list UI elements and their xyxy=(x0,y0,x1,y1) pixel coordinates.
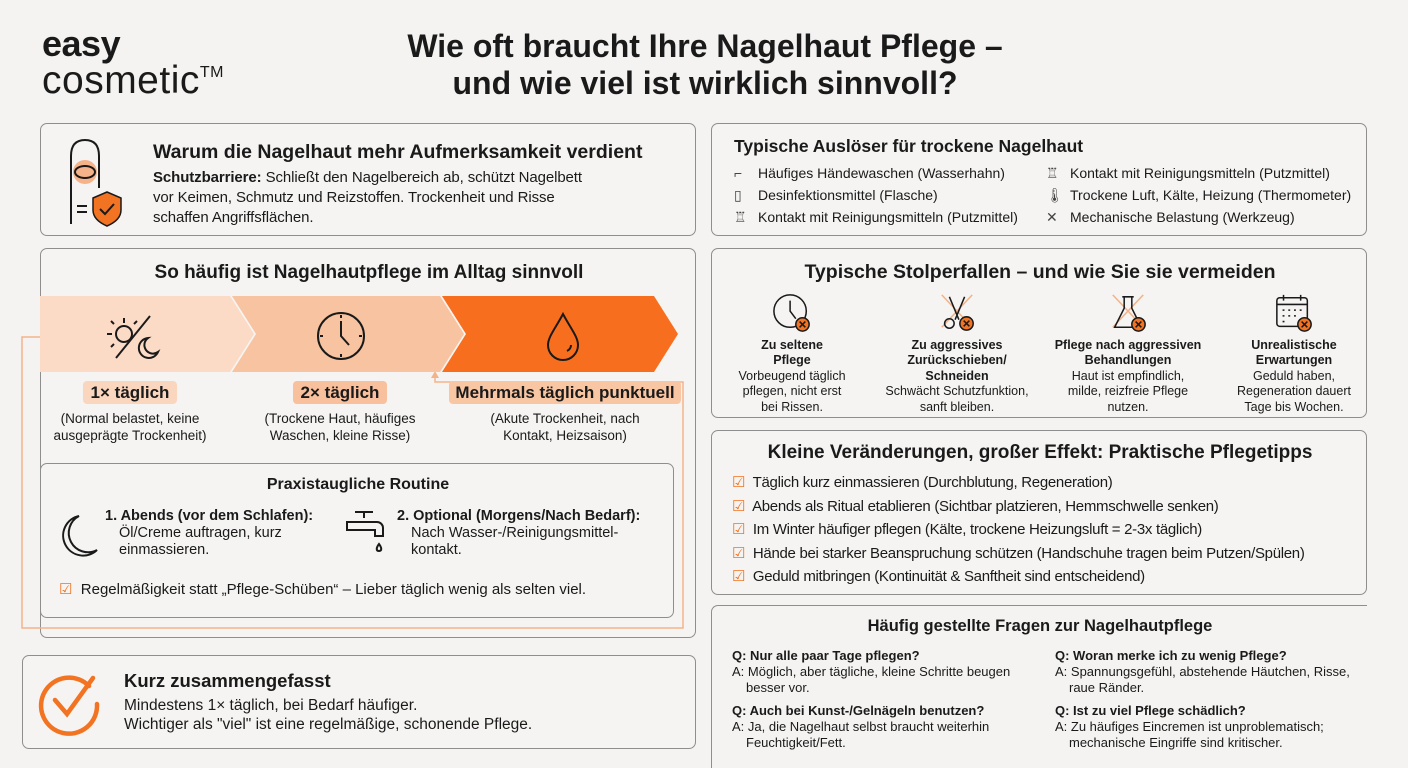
faq col 2: Q: Woran merke ich zu wenig Pflege? xyxy=(1055,648,1287,663)
pitfall 1: pflegen, nicht erst xyxy=(743,384,841,398)
pitfall 3: milde, reizfreie Pflege xyxy=(1068,384,1188,398)
icon: sun moon xyxy=(107,315,160,359)
icon: clock xyxy=(317,312,365,360)
panel: summary xyxy=(22,655,696,749)
list col 1: Häufiges Händewaschen (Wasserhahn) xyxy=(758,165,1005,181)
label: 2x: (Trockene Haut, häufiges xyxy=(264,411,416,426)
faq col 1: A: Möglich, aber tägliche, kleine Schritte beugen besser vor. xyxy=(732,664,1010,695)
tip list: ☑ Geduld mitbringen (Kontinuität & Sanftheit sind entscheidend) xyxy=(732,568,1145,585)
list col 1: ▯ xyxy=(734,187,742,203)
list col 2: ♖ xyxy=(1046,165,1059,181)
chevrons xyxy=(40,296,678,372)
label: 2x xyxy=(264,381,416,443)
list col 2: ✕ xyxy=(1046,209,1058,225)
pitfall 2: Schneiden xyxy=(925,368,989,382)
orange connector line xyxy=(21,336,684,629)
faq col 1: Q: Auch bei Kunst-/Gelnägeln benutzen? xyxy=(732,703,984,718)
pitfall 1: Vorbeugend täglich xyxy=(738,368,846,382)
label: mehrmals xyxy=(449,381,681,443)
pitfall 2 xyxy=(885,294,1029,414)
pitfall 2: Zu aggressives xyxy=(911,338,1002,352)
heading: Typische Auslöser für trockene Nagelhaut xyxy=(734,136,1083,156)
heading: Kleine Veränderungen, großer Effekt: Praktische Pflegetipps xyxy=(768,442,1312,463)
pitfall 2: Zurückschieben/ xyxy=(907,353,1007,367)
pitfall 4: Geduld haben, xyxy=(1253,368,1335,382)
label: 2x: Waschen, kleine Risse) xyxy=(270,428,410,443)
pitfall 3: Haut ist empfindlich, xyxy=(1072,368,1184,382)
text: Mindestens 1× täglich, bei Bedarf häufiger. xyxy=(124,697,417,714)
routine item 1: einmassieren. xyxy=(119,542,209,558)
label: 1x: 1× täglich xyxy=(91,383,169,402)
tip list: ☑ Im Winter häufiger pflegen (Kälte, trockene Heizungsluft = 2-3x täglich) xyxy=(732,521,1202,538)
heading: Typische Stolperfallen – und wie Sie sie vermeiden xyxy=(804,261,1276,283)
panel: triggers xyxy=(711,123,1367,236)
label: mehrmals: Mehrmals täglich punktuell xyxy=(455,383,675,402)
list col 2: Kontakt mit Reinigungsmitteln (Putzmittel) xyxy=(1070,165,1330,181)
list col 2 xyxy=(1046,165,1351,225)
routine item 1: Öl/Creme auftragen, kurz xyxy=(119,525,282,541)
panel: tips xyxy=(711,430,1367,595)
tip list xyxy=(732,474,1305,585)
faq col 2: A: Zu häufiges Eincremen ist unproblematisch; mechanische Eingriffe sind kritischer. xyxy=(1055,719,1324,750)
panel: frequency xyxy=(40,248,696,638)
faq col 2 xyxy=(1055,648,1350,750)
list col 1: ⌐ xyxy=(734,165,742,181)
label: 2x: 2× täglich xyxy=(301,383,379,402)
icon: moon xyxy=(62,515,98,557)
list col 1 xyxy=(734,165,1018,225)
text xyxy=(124,697,532,733)
list col 1: ♖ xyxy=(734,209,747,225)
tip list: ☑ Hände bei starker Beanspruchung schützen (Handschuhe tragen beim Putzen/Spülen) xyxy=(732,544,1305,562)
icon: tap xyxy=(346,511,384,552)
logo: easy xyxy=(42,23,120,64)
heading: Praxistaugliche Routine xyxy=(267,476,449,493)
faq col 1 xyxy=(732,648,1010,750)
tip list: ☑ Abends als Ritual etablieren (Sichtbar platzieren, Hemmschwelle senken) xyxy=(732,498,1218,514)
list col 1: Kontakt mit Reinigungsmitteln (Putzmittel) xyxy=(758,209,1018,225)
heading: So häufig ist Nagelhautpflege im Alltag sinnvoll xyxy=(155,262,583,283)
icon: check circle xyxy=(38,675,100,736)
routine item 2: Nach Wasser-/Reinigungsmittel- xyxy=(411,525,618,541)
text: Wichtiger als "viel" ist eine regelmäßige, schonende Pflege. xyxy=(124,716,532,733)
text: Schutzbarriere: Schließt den Nagelbereich ab, schützt Nagelbett xyxy=(153,169,582,186)
icon: drop xyxy=(547,312,579,361)
label: mehrmals: Kontakt, Heizsaison) xyxy=(503,428,627,443)
icon: finger shield xyxy=(70,139,122,227)
title: und wie viel ist wirklich sinnvoll? xyxy=(452,65,958,101)
faq col 1: Q: Nur alle paar Tage pflegen? xyxy=(732,648,920,663)
routine item 1: 1. Abends (vor dem Schlafen): xyxy=(105,508,313,524)
faq col 1: A: Ja, die Nagelhaut selbst braucht weiterhin Feuchtigkeit/Fett. xyxy=(732,719,989,750)
tip list: ☑ Täglich kurz einmassieren (Durchblutung, Regeneration) xyxy=(732,474,1112,491)
pitfall 1: bei Rissen. xyxy=(761,400,823,414)
routine item 1 xyxy=(105,508,313,558)
list col 2: Mechanische Belastung (Werkzeug) xyxy=(1070,209,1295,225)
pitfall 4: Regeneration dauert xyxy=(1237,384,1351,398)
heading: Kurz zusammengefasst xyxy=(124,670,331,691)
list col 1: Desinfektionsmittel (Flasche) xyxy=(758,187,938,203)
text xyxy=(153,169,582,226)
heading: Häufig gestellte Fragen zur Nagelhautpflege xyxy=(868,617,1212,635)
pitfall 4: Unrealistische xyxy=(1251,338,1337,352)
pitfall 4: Tage bis Wochen. xyxy=(1244,400,1344,414)
title xyxy=(407,28,1003,101)
text: vor Keimen, Schmutz und Reizstoffen. Trockenheit und Risse xyxy=(153,189,555,206)
pitfall 1: Pflege xyxy=(773,353,811,367)
pitfall 3: nutzen. xyxy=(1107,400,1148,414)
routine item 2 xyxy=(397,508,640,558)
pitfall 2: Schwächt Schutzfunktion, xyxy=(885,384,1029,398)
list col 2: Trockene Luft, Kälte, Heizung (Thermometer) xyxy=(1070,187,1351,203)
pitfall 4 xyxy=(1237,294,1351,414)
label: 1x: (Normal belastet, keine xyxy=(61,411,199,426)
routine item 2: kontakt. xyxy=(411,542,462,558)
panel: routine xyxy=(40,463,674,618)
pitfall 1: Zu seltene xyxy=(761,338,823,352)
logo: cosmeticTM xyxy=(42,59,224,102)
pitfall 4: Erwartungen xyxy=(1256,353,1332,367)
panel: why xyxy=(40,123,696,236)
pitfall 2: sanft bleiben. xyxy=(920,400,994,414)
logo xyxy=(42,23,224,102)
regularity note: ☑ Regelmäßigkeit statt „Pflege-Schüben“ – Lieber täglich wenig als selten viel. xyxy=(59,581,586,598)
title: Wie oft braucht Ihre Nagelhaut Pflege – xyxy=(407,28,1003,64)
pitfall 1 xyxy=(738,294,846,414)
panel: FAQ xyxy=(711,605,1367,768)
heading: Warum die Nagelhaut mehr Aufmerksamkeit verdient xyxy=(153,141,642,163)
label: 1x xyxy=(53,381,207,443)
pitfall 3: Pflege nach aggressiven xyxy=(1055,338,1201,352)
pitfall 3: Behandlungen xyxy=(1085,353,1171,367)
routine item 2: 2. Optional (Morgens/Nach Bedarf): xyxy=(397,508,640,524)
panel: pitfalls xyxy=(711,248,1367,418)
text: schaffen Angriffsflächen. xyxy=(153,209,313,226)
label: mehrmals: (Akute Trockenheit, nach xyxy=(490,411,640,426)
pitfall 3 xyxy=(1055,294,1201,414)
label: 1x: ausgeprägte Trockenheit) xyxy=(53,428,207,443)
faq col 2: A: Spannungsgefühl, abstehende Häutchen, Risse, raue Ränder. xyxy=(1055,664,1350,695)
list col 2: 🌡 xyxy=(1046,187,1064,203)
faq col 2: Q: Ist zu viel Pflege schädlich? xyxy=(1055,703,1246,718)
